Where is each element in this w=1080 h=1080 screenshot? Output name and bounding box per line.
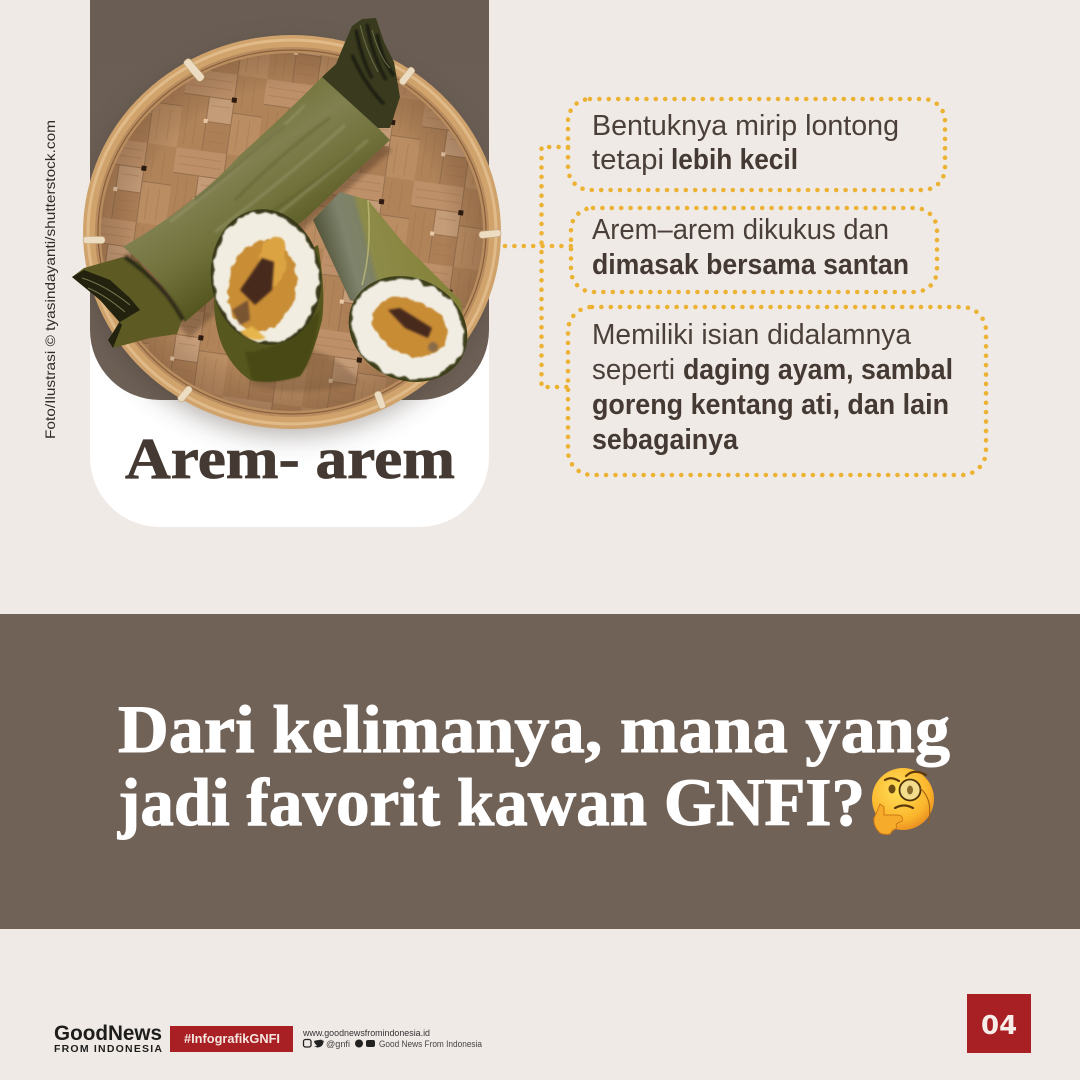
panel: arem-arem card xyxy=(86,0,494,527)
question text xyxy=(117,691,950,840)
icon: social instagram xyxy=(304,1040,311,1047)
footer logo: GoodNews xyxy=(54,1021,162,1045)
top leaf end xyxy=(322,18,400,128)
card white base xyxy=(90,0,489,527)
basket ties xyxy=(83,57,501,410)
icon: social facebook xyxy=(355,1040,363,1048)
panel: fact 3: Memiliki isian didalamnya xyxy=(592,319,912,351)
footer contact xyxy=(302,1028,482,1049)
bamboo basket xyxy=(83,35,501,429)
icon: social twitter xyxy=(314,1040,324,1048)
footer logo xyxy=(54,1021,162,1055)
panel: fact 2: dimasak bersama santan xyxy=(592,249,909,281)
footer contact: www.goodnewsfromindonesia.id xyxy=(302,1028,430,1038)
title: Arem-arem: Arem- arem xyxy=(125,426,455,491)
middle cut piece xyxy=(202,202,330,382)
question text: Dari kelimanya, mana yang xyxy=(118,691,950,767)
hashtag tag: #InfografikGNFI xyxy=(184,1032,280,1046)
panel: fact 3: sebagainya xyxy=(592,424,739,456)
panel: fact 1 xyxy=(568,99,945,190)
panel: fact 2: Arem–arem dikukus dan xyxy=(592,214,889,246)
photo credit: Foto/Ilustrasi © tyasindayanti/shutterstock.com xyxy=(42,120,58,439)
panel: fact 1: tetapi xyxy=(592,144,664,176)
basket shadow xyxy=(90,292,478,452)
handle: @gnfi xyxy=(326,1039,350,1049)
footer logo: FROM INDONESIA xyxy=(54,1043,162,1055)
panel: fact 1: Bentuknya mirip lontong xyxy=(592,110,899,142)
question band xyxy=(0,614,1080,929)
connector lines xyxy=(505,147,571,387)
page number: 04 xyxy=(981,1011,1017,1041)
icon: social youtube xyxy=(366,1040,375,1047)
panel: fact 3: daging ayam, sambal xyxy=(683,354,953,386)
page number xyxy=(967,994,1031,1053)
hashtag tag xyxy=(170,1026,293,1052)
right cut piece xyxy=(313,192,485,401)
panel: fact 3: goreng kentang ati, dan lain xyxy=(592,389,949,421)
illustration: arem-arem on bamboo basket xyxy=(72,18,501,429)
icon: thinking face with monocle xyxy=(872,768,934,834)
panel: fact 3 xyxy=(568,307,986,475)
panel: fact 2 xyxy=(571,208,937,292)
large roll xyxy=(72,18,400,348)
question text: jadi favorit kawan GNFI? xyxy=(117,764,865,840)
card dark top xyxy=(90,0,489,400)
page name: Good News From Indonesia xyxy=(379,1039,482,1049)
panel: fact 3: seperti xyxy=(592,354,675,386)
bottom leaf end xyxy=(72,257,183,348)
panel: fact 1: lebih kecil xyxy=(671,144,798,176)
